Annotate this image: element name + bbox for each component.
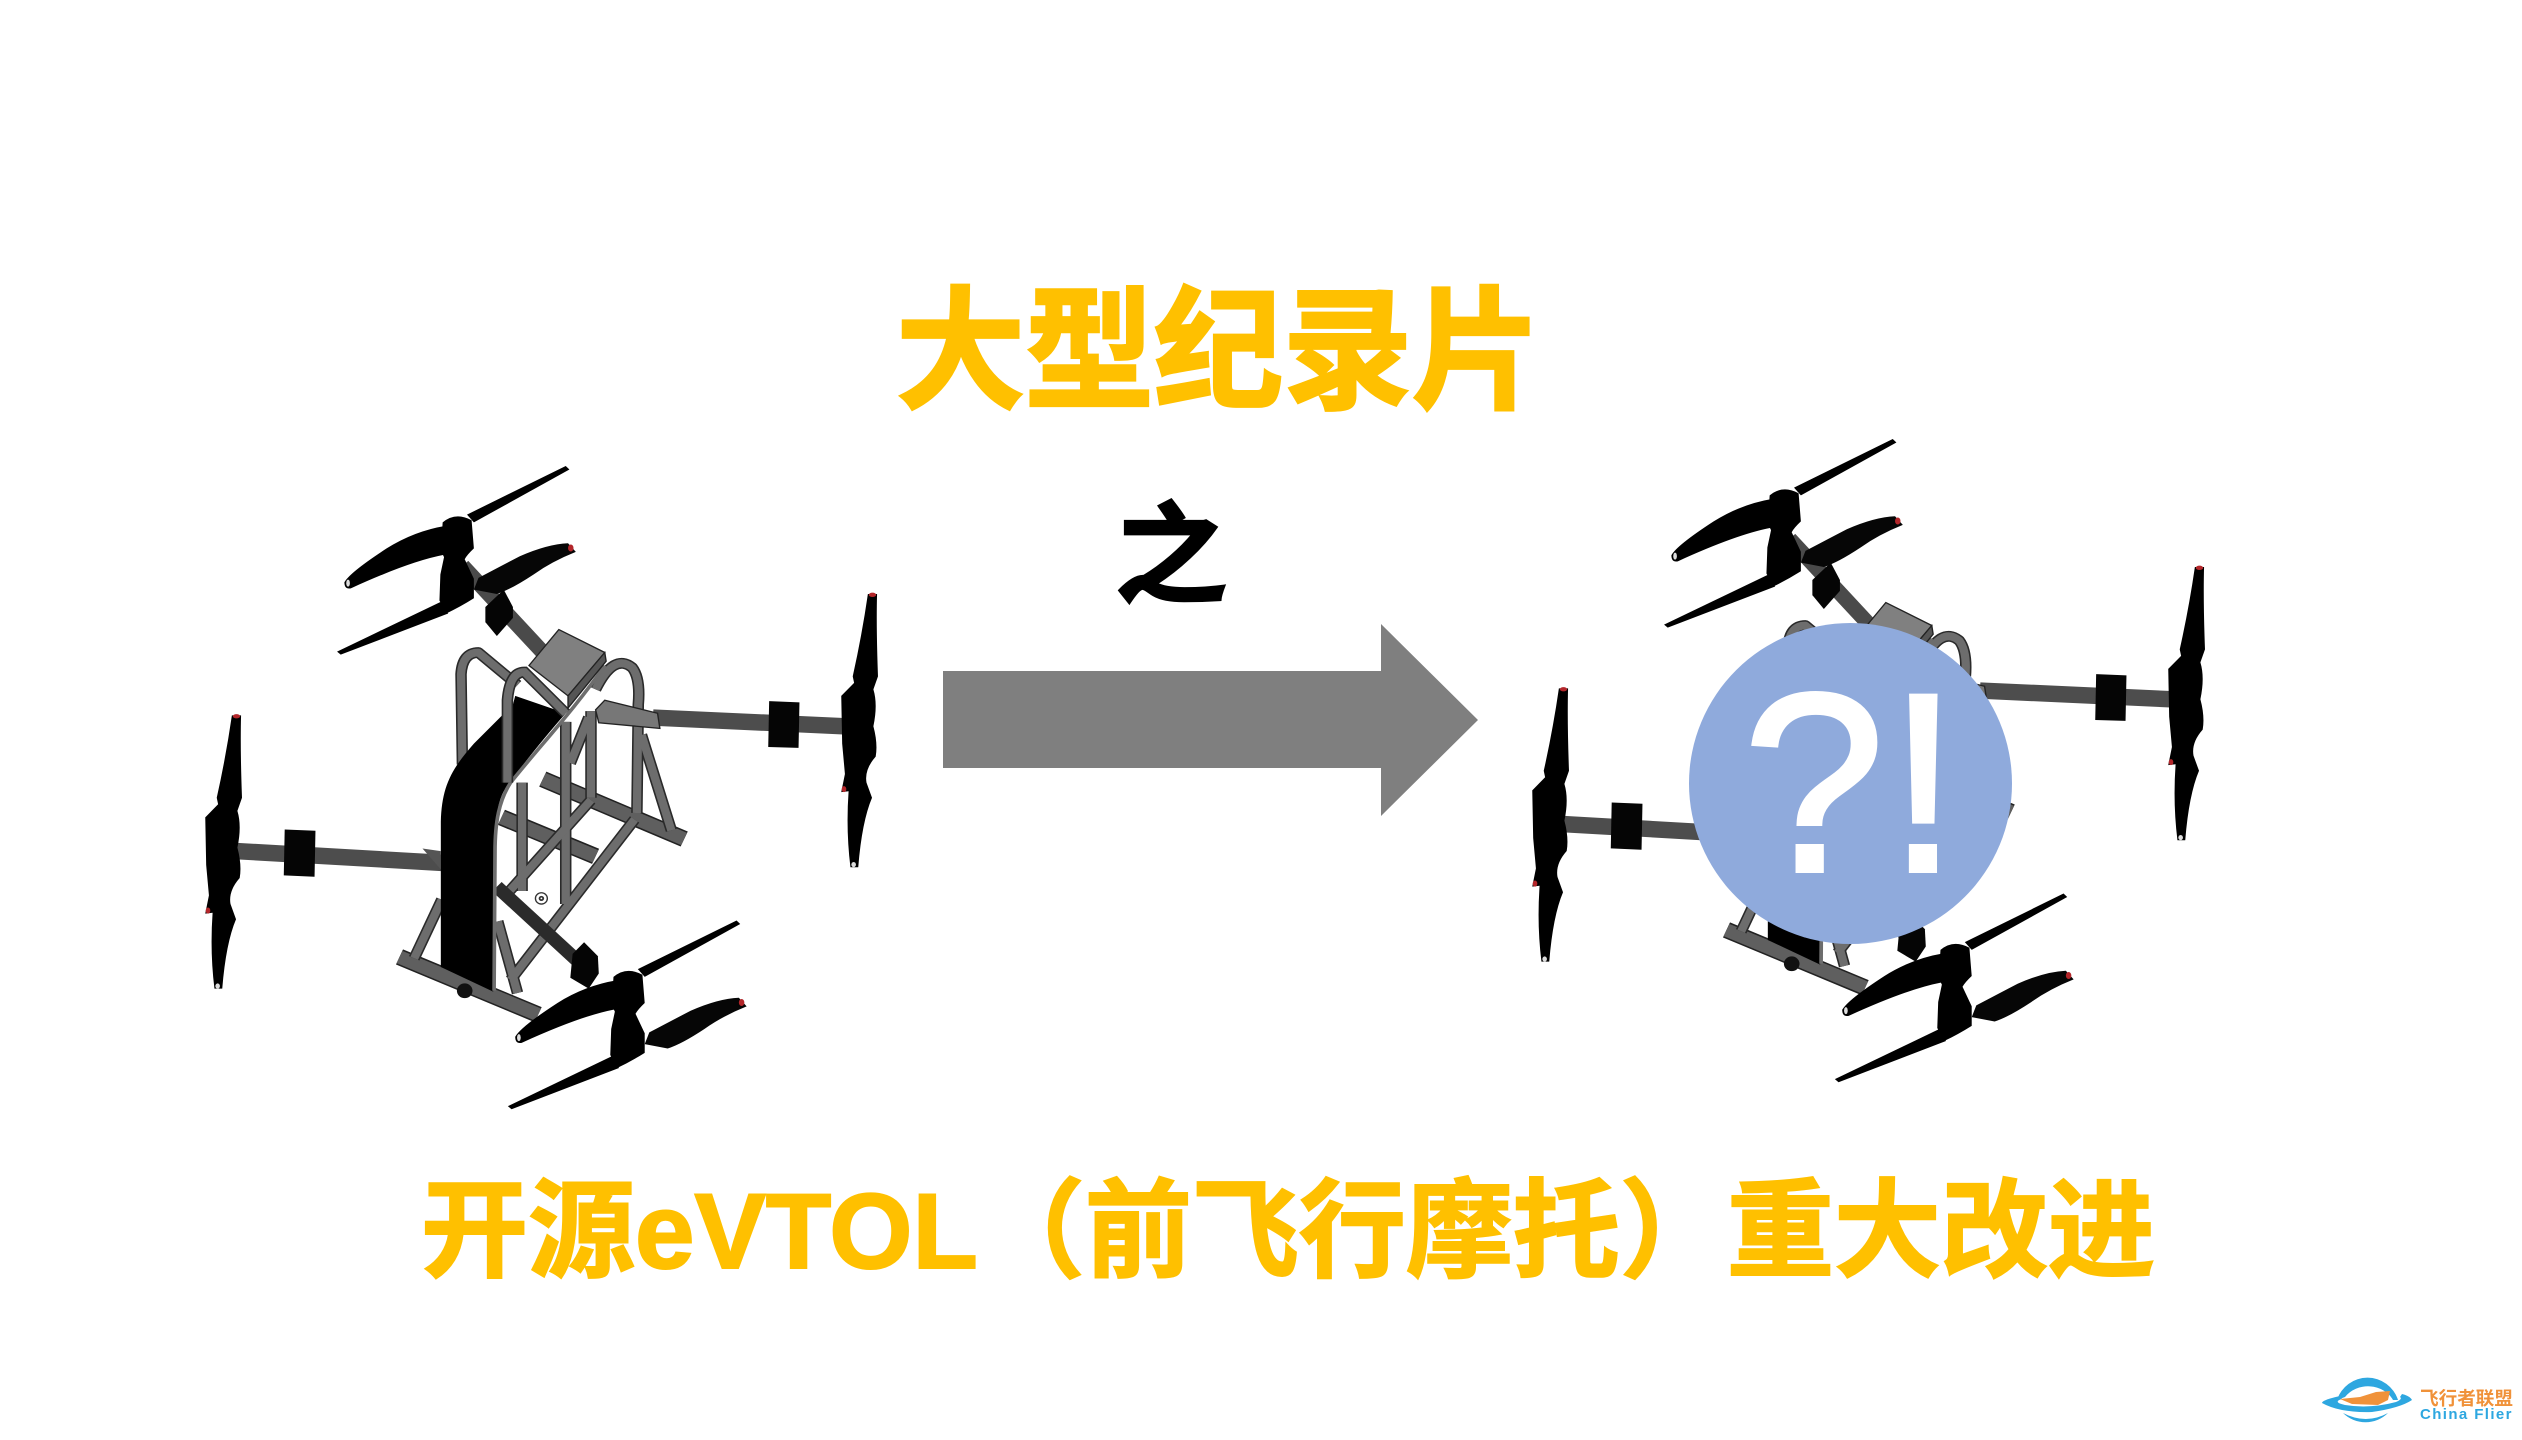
bottom arm clamp — [570, 942, 599, 989]
propeller: bottom — [508, 921, 747, 1109]
propeller: left — [205, 714, 242, 989]
top control box — [529, 630, 606, 708]
skid clamp — [457, 983, 473, 998]
arm: left — [231, 851, 442, 863]
arm: bottom — [497, 887, 584, 967]
badge text: ?! — [1743, 641, 1959, 926]
logo globe and ring — [2322, 1378, 2412, 1422]
drone before the improvement — [205, 466, 878, 1109]
small round fitting — [535, 893, 547, 904]
question badge — [1689, 623, 2012, 944]
arm: right — [653, 718, 844, 726]
subtitle: 开源eVTOL（前飞行摩托）重大改进 — [421, 1171, 2155, 1291]
panel edge line — [494, 666, 605, 991]
logo english name: China Flier — [2420, 1406, 2513, 1423]
left arm mount plate — [422, 849, 441, 869]
propeller: top — [337, 466, 576, 655]
right arm mount plate — [596, 700, 660, 728]
title: 大型纪录片: 大型纪录片 — [896, 277, 1541, 426]
front hoop over panel — [507, 672, 566, 783]
connector word: 之: 之 — [1115, 496, 1227, 617]
watermark logo — [2322, 1378, 2513, 1423]
arm clamps — [284, 590, 799, 877]
drone after the improvement — [1532, 439, 2205, 1082]
arm: top — [462, 566, 545, 655]
drone silhouette — [1532, 439, 2205, 1082]
propeller: right — [841, 593, 878, 867]
logo plane — [2340, 1391, 2390, 1405]
logo chinese name: 飞行者联盟 — [2420, 1388, 2513, 1409]
arrow — [943, 624, 1478, 816]
black curved panel — [441, 696, 566, 992]
frame tubes — [399, 653, 684, 1015]
badge circle — [1689, 623, 2012, 944]
